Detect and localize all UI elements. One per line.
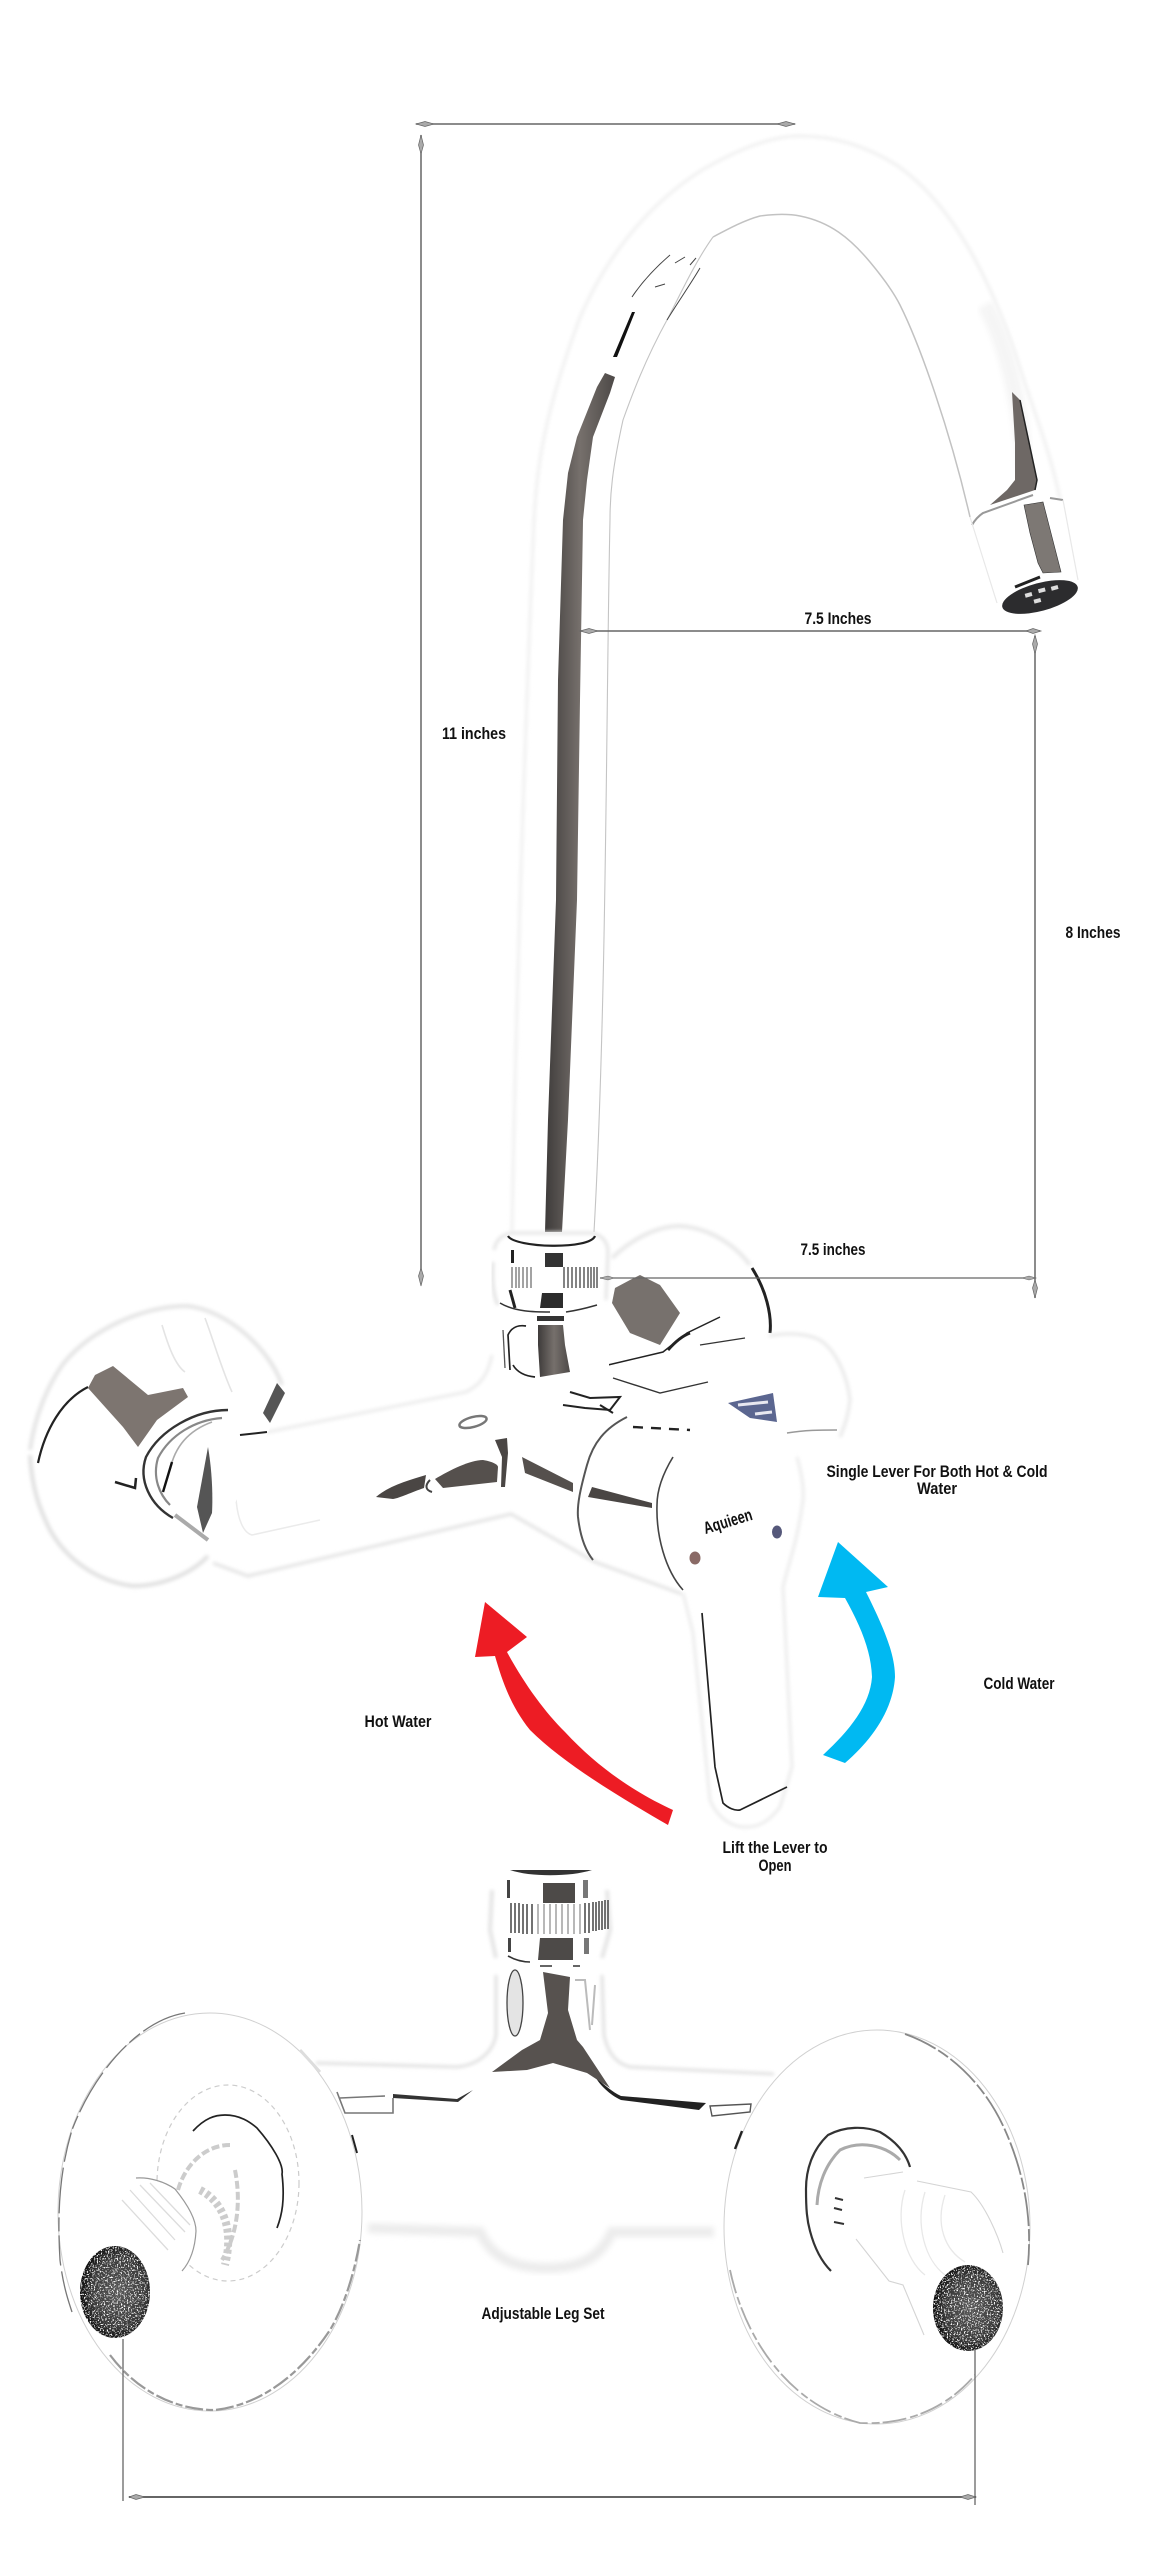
spout long dark reflection	[545, 373, 615, 1232]
lever handle	[657, 1413, 803, 1827]
spout head dark reflection	[990, 392, 1037, 505]
body swirl reflection	[563, 1392, 620, 1413]
dimension: reach	[580, 628, 1041, 634]
leg set view	[58, 1866, 1030, 2505]
left inner disc	[157, 2085, 299, 2281]
spout thin reflection lines	[632, 255, 700, 320]
dimension: stem to clearance line	[600, 1276, 1036, 1280]
label: single lever: Water	[917, 1479, 957, 1498]
label: hot water: Hot Water	[364, 1712, 432, 1731]
label: 7.5 Inches top: 7.5 Inches	[804, 609, 872, 628]
arrow: cold water	[818, 1542, 895, 1763]
spout black sliver	[613, 312, 635, 357]
horizontal pipe	[316, 1964, 774, 2274]
left port opening	[80, 2246, 150, 2338]
brand name: Aquieen	[701, 1505, 755, 1538]
label: 11 inches: 11 inches	[442, 724, 506, 743]
neck reflection	[492, 1970, 610, 2088]
cylinder rear and body	[213, 1310, 850, 1600]
dimension: total height	[418, 135, 424, 1286]
left wall flange	[27, 1302, 285, 1588]
left flange	[58, 2013, 362, 2411]
arm small highlight ring	[458, 1414, 488, 1430]
arm reflections	[376, 1438, 652, 1508]
spout faint highlight band	[985, 305, 1025, 470]
label: single lever	[826, 1462, 1048, 1498]
nozzle ring seam	[972, 495, 1063, 525]
label: cold water: Cold Water	[984, 1674, 1055, 1693]
dimension: spout clearance	[1032, 635, 1038, 1298]
stem neck reflections	[537, 1316, 564, 1321]
label: lift the lever: Open	[758, 1856, 792, 1875]
nozzle grey bar	[1024, 502, 1061, 573]
top collar	[490, 1866, 610, 1966]
threaded wall connector	[144, 1410, 267, 1540]
label: 8 Inches: 8 Inches	[1066, 923, 1120, 942]
spout inner edge shading	[594, 237, 713, 1232]
aerator	[999, 573, 1081, 621]
cold indicator dot	[772, 1526, 782, 1538]
hot indicator dot	[690, 1552, 700, 1564]
right flange	[724, 2030, 1030, 2424]
spout tube	[510, 133, 1080, 1240]
spout arch grey highlight	[713, 214, 970, 517]
right port opening	[933, 2265, 1003, 2351]
spout assembly	[510, 133, 1081, 1240]
arrow: hot water	[475, 1602, 673, 1825]
left threaded pipe	[90, 2178, 196, 2300]
rear wall flange	[608, 1223, 770, 1400]
label: single lever: Single Lever For Both Hot & Cold	[826, 1462, 1048, 1481]
dimension: spout width	[416, 122, 795, 126]
label: lift the lever	[722, 1838, 828, 1875]
wall mixer body	[27, 1223, 850, 1827]
nozzle lip	[1015, 577, 1040, 587]
label: adjustable leg set: Adjustable Leg Set	[482, 2304, 605, 2323]
right inner disc	[806, 2128, 910, 2271]
nozzle edge	[970, 500, 1078, 603]
dimension: leg spacing	[123, 2339, 976, 2505]
stem collar	[493, 1233, 608, 1377]
spout soft outer rim	[512, 136, 1060, 1232]
label: lift the lever: Lift the Lever to	[722, 1838, 828, 1857]
cylinder sleeve arc	[578, 1417, 690, 1560]
label: 7.5 inches lower: 7.5 inches	[800, 1240, 866, 1259]
right threaded pipe	[849, 2172, 1003, 2335]
product sticker	[728, 1393, 777, 1422]
